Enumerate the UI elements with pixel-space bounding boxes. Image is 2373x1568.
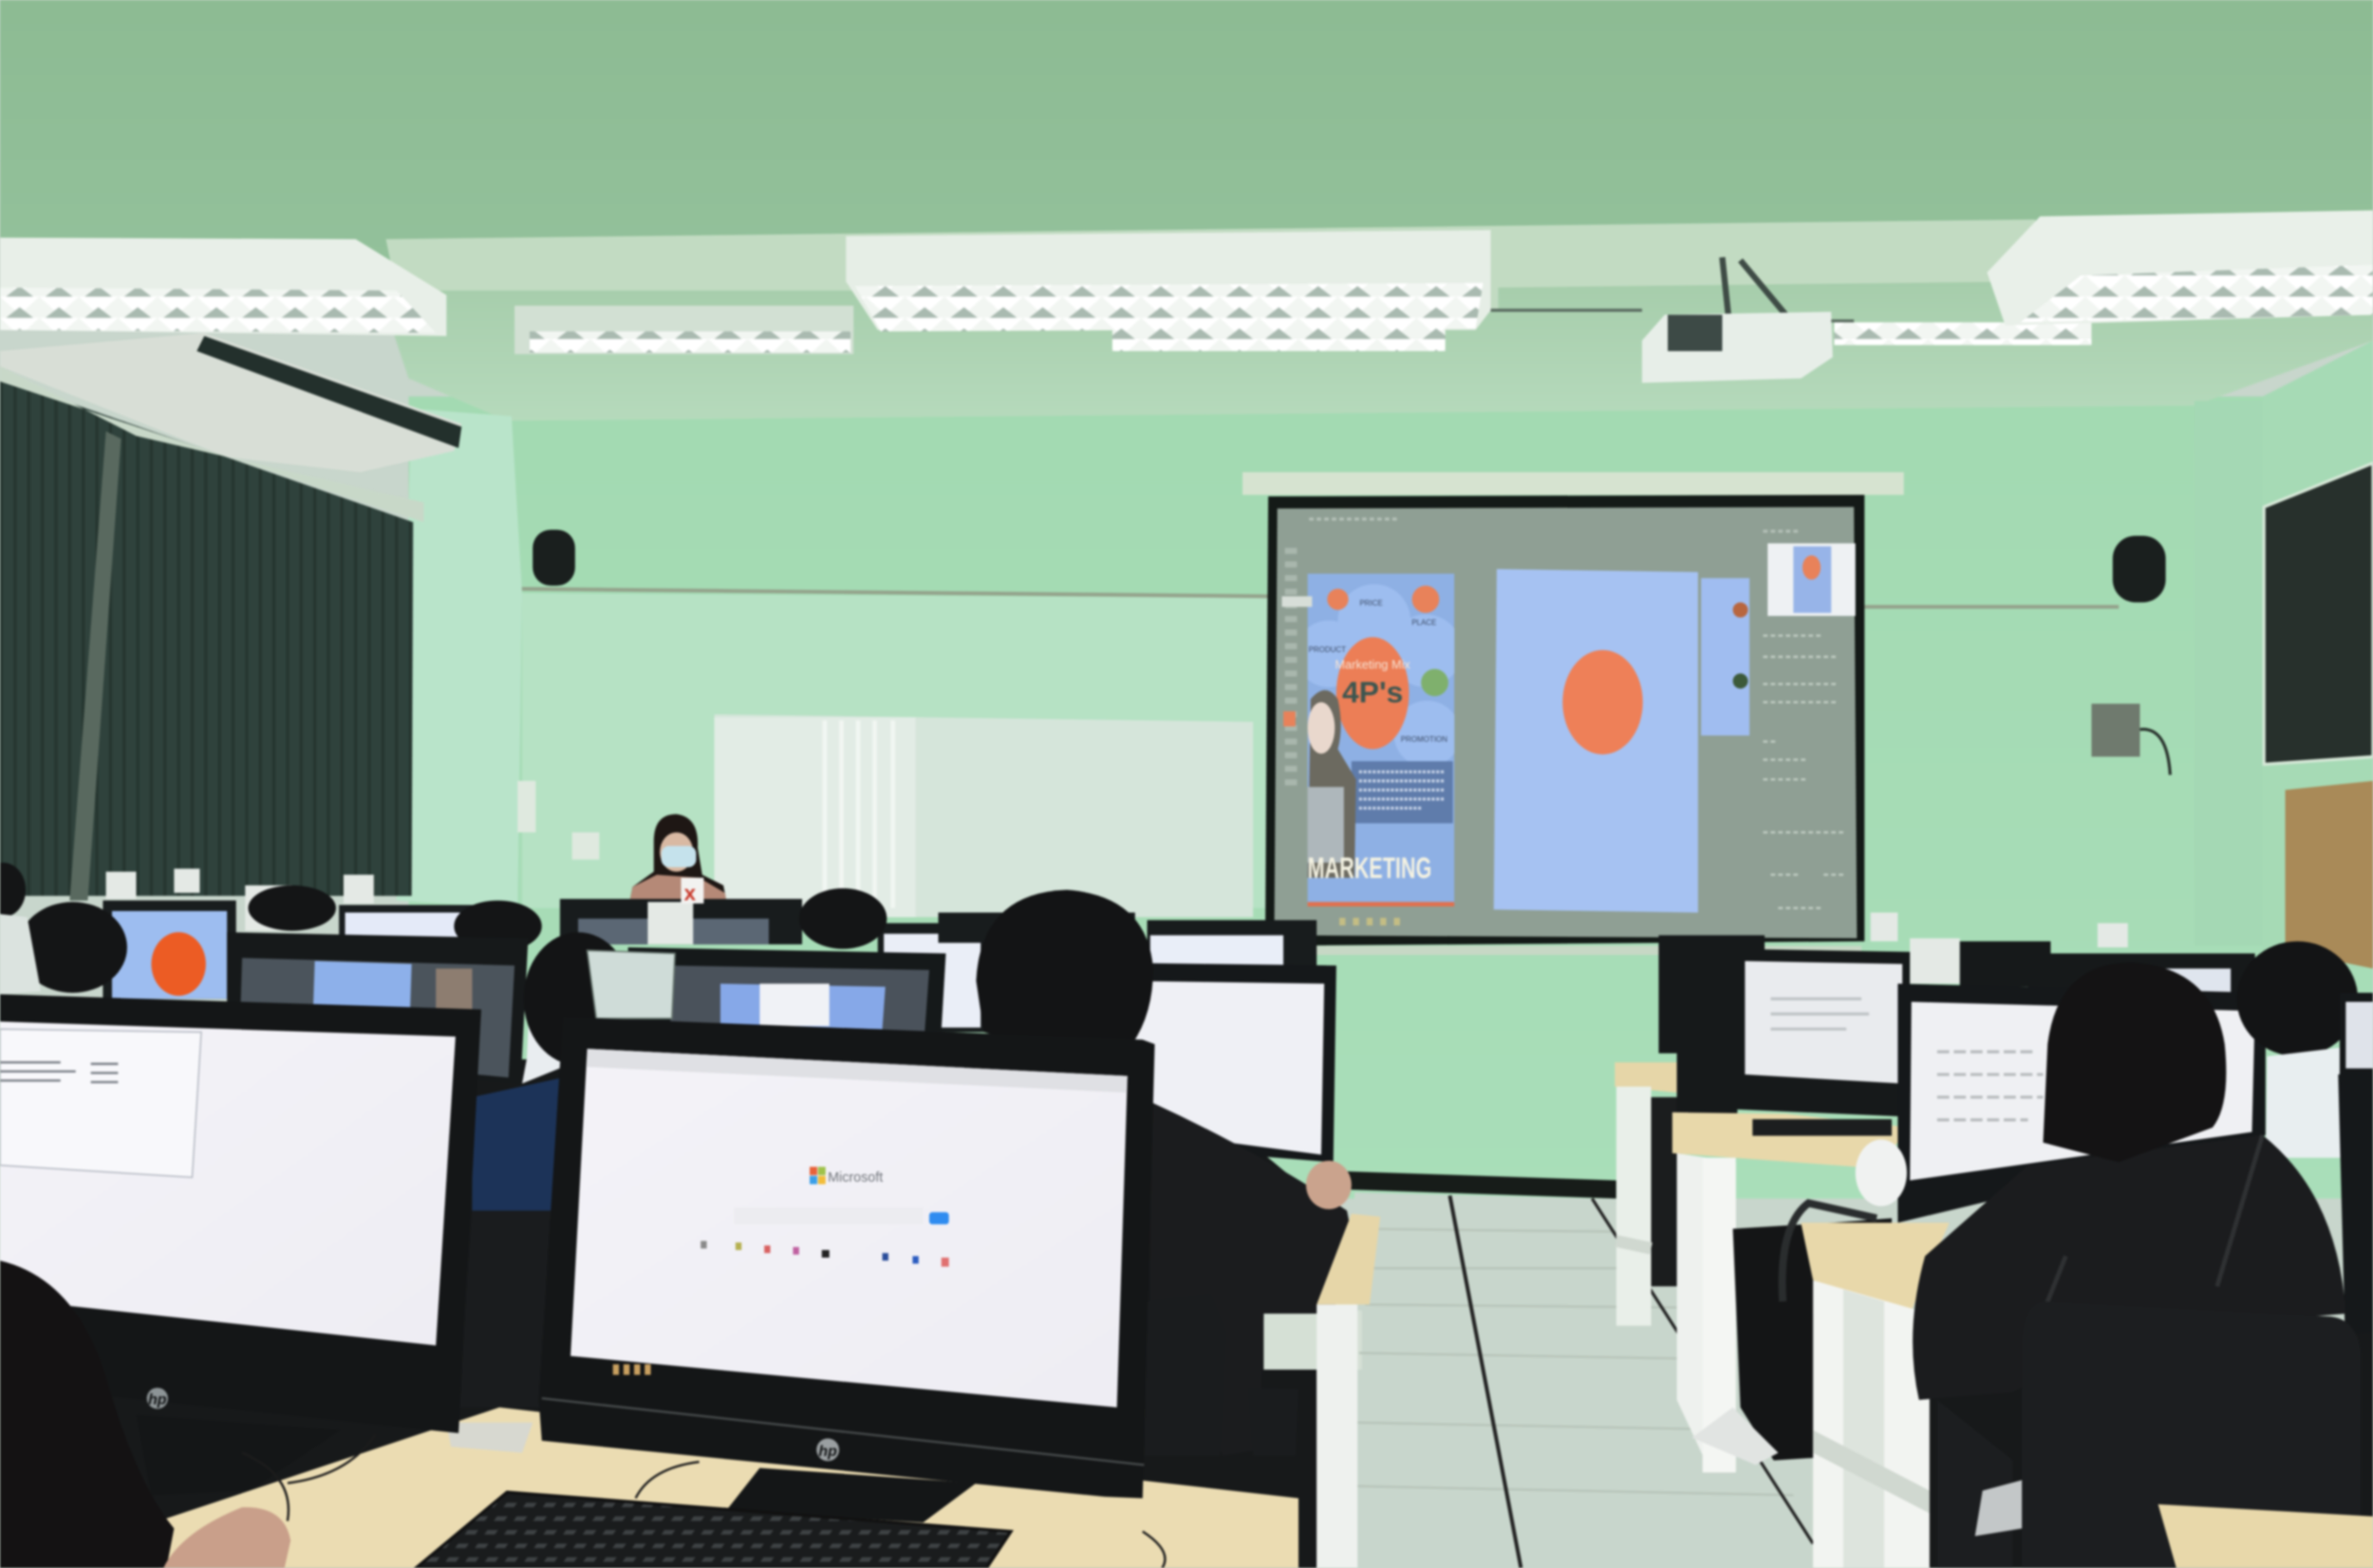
near right chair: [1937, 1301, 2361, 1568]
screen housing: [1243, 472, 1904, 495]
near right desk: [1801, 1223, 1950, 1568]
air conditioner: [0, 333, 461, 522]
hp logo front: [816, 1438, 839, 1461]
right artboard sliver: [1701, 578, 1749, 736]
hp logo front: hp: [818, 1444, 837, 1460]
student in black hoodie: [1913, 962, 2345, 1400]
wall switch box: [2091, 703, 2170, 775]
rear heads: [0, 863, 887, 993]
window blinds: [0, 379, 413, 896]
screen image: [1274, 507, 1857, 939]
right desk with legs: [1672, 1112, 1910, 1472]
back wall: [408, 397, 2373, 1199]
shortcut icons: [701, 1241, 949, 1267]
corner desk: [2158, 1504, 2373, 1568]
desktop taskbar icons: [613, 1366, 654, 1372]
screen frame: [1265, 495, 1864, 946]
red x card: x: [684, 882, 697, 905]
white sleeve: [1856, 1140, 1907, 1206]
centre desk and leg: [1317, 1214, 1380, 1568]
ceiling soffit band: [386, 219, 2035, 311]
left poster on screen: 4P's: [1342, 675, 1403, 709]
search box: [734, 1207, 949, 1224]
poster dark text block: [1352, 761, 1453, 823]
rear screen monitors row: [103, 899, 1317, 1032]
white card at left: [0, 914, 41, 995]
second row monitor centre: [588, 947, 945, 1032]
wall outlets: [517, 781, 599, 860]
front left desk: [159, 1408, 1299, 1568]
right column and side wall: [2195, 341, 2373, 968]
left poster on screen: PRICE: [1359, 599, 1383, 607]
lower left dark fill: [0, 1059, 1332, 1568]
second row monitor left: [227, 932, 528, 1084]
navigator thumbnail: [1767, 543, 1856, 616]
monitor display: [0, 1021, 456, 1345]
left large monitor: [0, 995, 481, 1495]
lower ceiling strip: [379, 280, 2373, 420]
left poster on screen: PLACE: [1411, 619, 1436, 627]
second row monitor right: [1090, 962, 1336, 1163]
foreground student hand: [163, 1507, 290, 1568]
microsoft logo: [810, 1167, 883, 1185]
desk name cards: [106, 868, 2128, 983]
right side blackboard: [2264, 463, 2373, 764]
rear monitor: [878, 924, 987, 1032]
blind highlight: [69, 431, 121, 901]
white-shirt student far right: [2237, 942, 2358, 1158]
projector: [1490, 257, 1854, 383]
rear monitor: [560, 899, 802, 944]
front monitor stand: [726, 1468, 976, 1522]
student navy jacket: [472, 932, 632, 1219]
left column: [397, 409, 522, 908]
ceiling light rear left: [514, 306, 853, 354]
cables: [242, 1435, 375, 1521]
tools bar: [1287, 548, 1295, 787]
wooden door: [2286, 781, 2373, 968]
front monitor display: [570, 1049, 1128, 1408]
speaker right: [2113, 535, 2166, 603]
upper ceiling: [0, 0, 2373, 303]
right rear desk: [1615, 1044, 1737, 1326]
whiteboard: [715, 715, 1253, 917]
cable near front monitor: [636, 1462, 1165, 1568]
dark fill under right chair: [1930, 1332, 2373, 1568]
poster 4P circle: [1336, 637, 1409, 749]
keyboard: [416, 1492, 1011, 1568]
right monitor large: [1897, 983, 2266, 1223]
poster marketing word: MARKETING: [1308, 850, 1431, 885]
right edge monitors: [2338, 993, 2373, 1568]
ceiling light centre: [846, 230, 1490, 351]
ceiling light right: [1987, 211, 2373, 326]
orange circle on artboard: [1562, 650, 1643, 755]
rear monitor: [939, 912, 1135, 943]
window on display: [0, 1029, 201, 1177]
centre student: [976, 890, 1356, 1456]
foreground student hair: [0, 1260, 174, 1568]
left poster on screen: Marketing Mix: [1335, 658, 1411, 672]
hp logo: [147, 1388, 168, 1409]
left poster on screen: [1296, 573, 1462, 906]
screen bottom strip: [1268, 946, 1861, 955]
cable port on desk: [446, 1423, 533, 1453]
centre chair behind front monitor: [458, 1211, 1299, 1456]
centre artboard: [1494, 569, 1698, 912]
rear teacher: [626, 814, 729, 917]
left poster on screen: PROMOTION: [1401, 735, 1448, 743]
right rear monitor dark: [1658, 935, 1765, 1054]
red x card: [681, 878, 703, 905]
whiteboard wall section: [522, 593, 1268, 908]
microsoft logo: Microsoft: [828, 1170, 883, 1185]
ceiling light rear right: [1834, 323, 2091, 345]
seated student legs: [1692, 1204, 1892, 1465]
hp logo: hp: [148, 1392, 167, 1409]
front monitor: [539, 1017, 1155, 1522]
right rear monitor row: [1960, 942, 2255, 999]
rear monitor: [339, 905, 476, 942]
rear monitor left small: [103, 901, 236, 999]
floor: [1263, 1171, 2373, 1568]
front monitor highlight line: [542, 1398, 1144, 1465]
properties panel text: [1763, 636, 1846, 908]
projection screen: [1243, 472, 1904, 955]
poster woman: [1308, 690, 1356, 878]
top menu: [1309, 519, 1801, 532]
left poster on screen: PRODUCT: [1309, 645, 1346, 654]
monitor right rear white: [1736, 949, 1910, 1117]
wall rail: [507, 588, 2119, 607]
ceiling light left: [0, 237, 446, 336]
speaker left: [533, 530, 575, 586]
taskbar icons: [1339, 920, 1400, 924]
rear monitor: [1148, 920, 1317, 965]
monitor stand: [136, 1415, 341, 1495]
